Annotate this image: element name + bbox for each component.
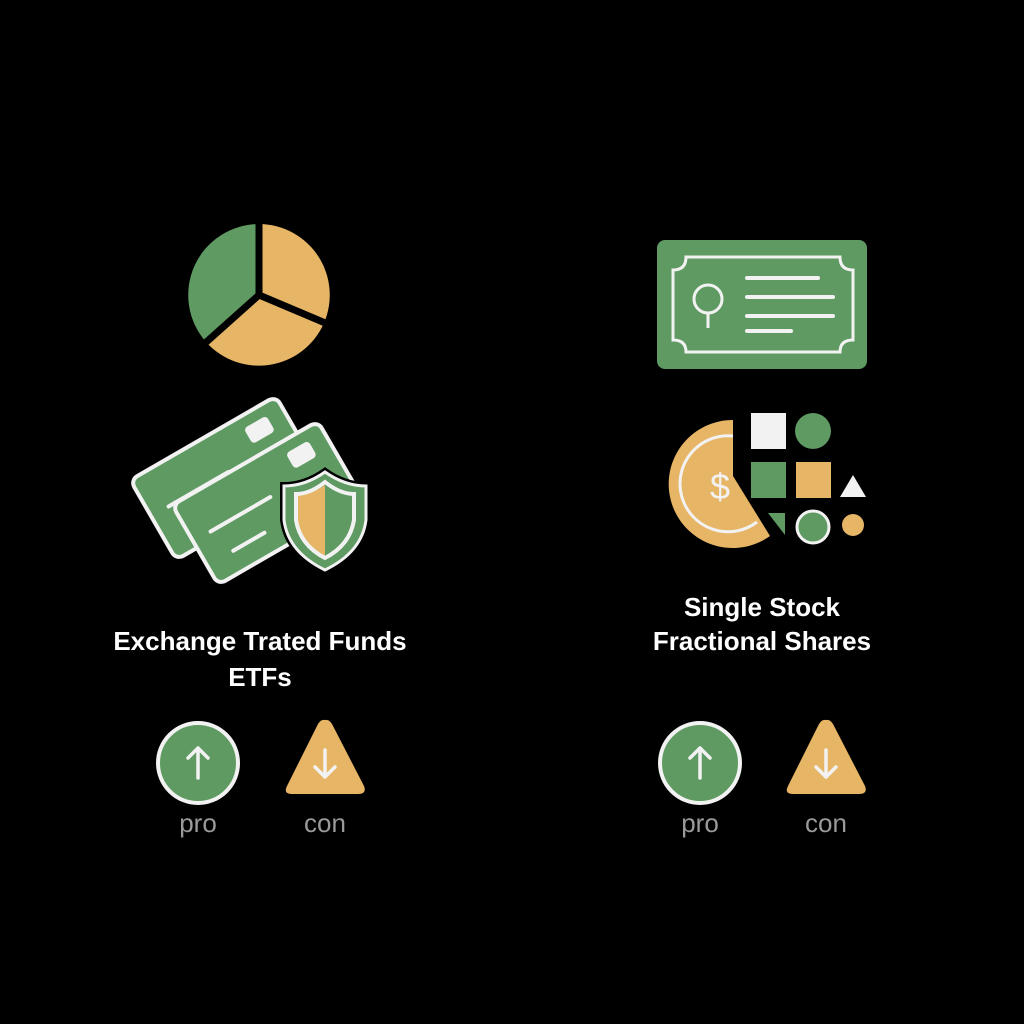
heading: single stock bbox=[653, 592, 871, 656]
icon: pro right bbox=[660, 723, 740, 803]
label: con left: con bbox=[304, 808, 346, 838]
icon: con left bbox=[286, 720, 365, 794]
icon: coin and fractional shapes: $ bbox=[710, 466, 730, 507]
heading: ETFs bbox=[113, 626, 407, 692]
icon: pie chart bbox=[188, 220, 330, 366]
label: pro right: pro bbox=[681, 808, 719, 838]
heading: ETFs: ETFs bbox=[228, 662, 292, 692]
heading: ETFs: Exchange Trated Funds bbox=[113, 626, 407, 656]
heading: single stock: Fractional Shares bbox=[653, 626, 871, 656]
icon: pro left bbox=[158, 723, 238, 803]
label: pro left: pro bbox=[179, 808, 217, 838]
icon: stock certificate bbox=[657, 240, 867, 369]
icon: coin and fractional shapes bbox=[669, 413, 866, 548]
icon: con right bbox=[787, 720, 866, 794]
heading: single stock: Single Stock bbox=[684, 592, 840, 622]
icon: cards with shield bbox=[130, 396, 366, 585]
label: con right: con bbox=[805, 808, 847, 838]
